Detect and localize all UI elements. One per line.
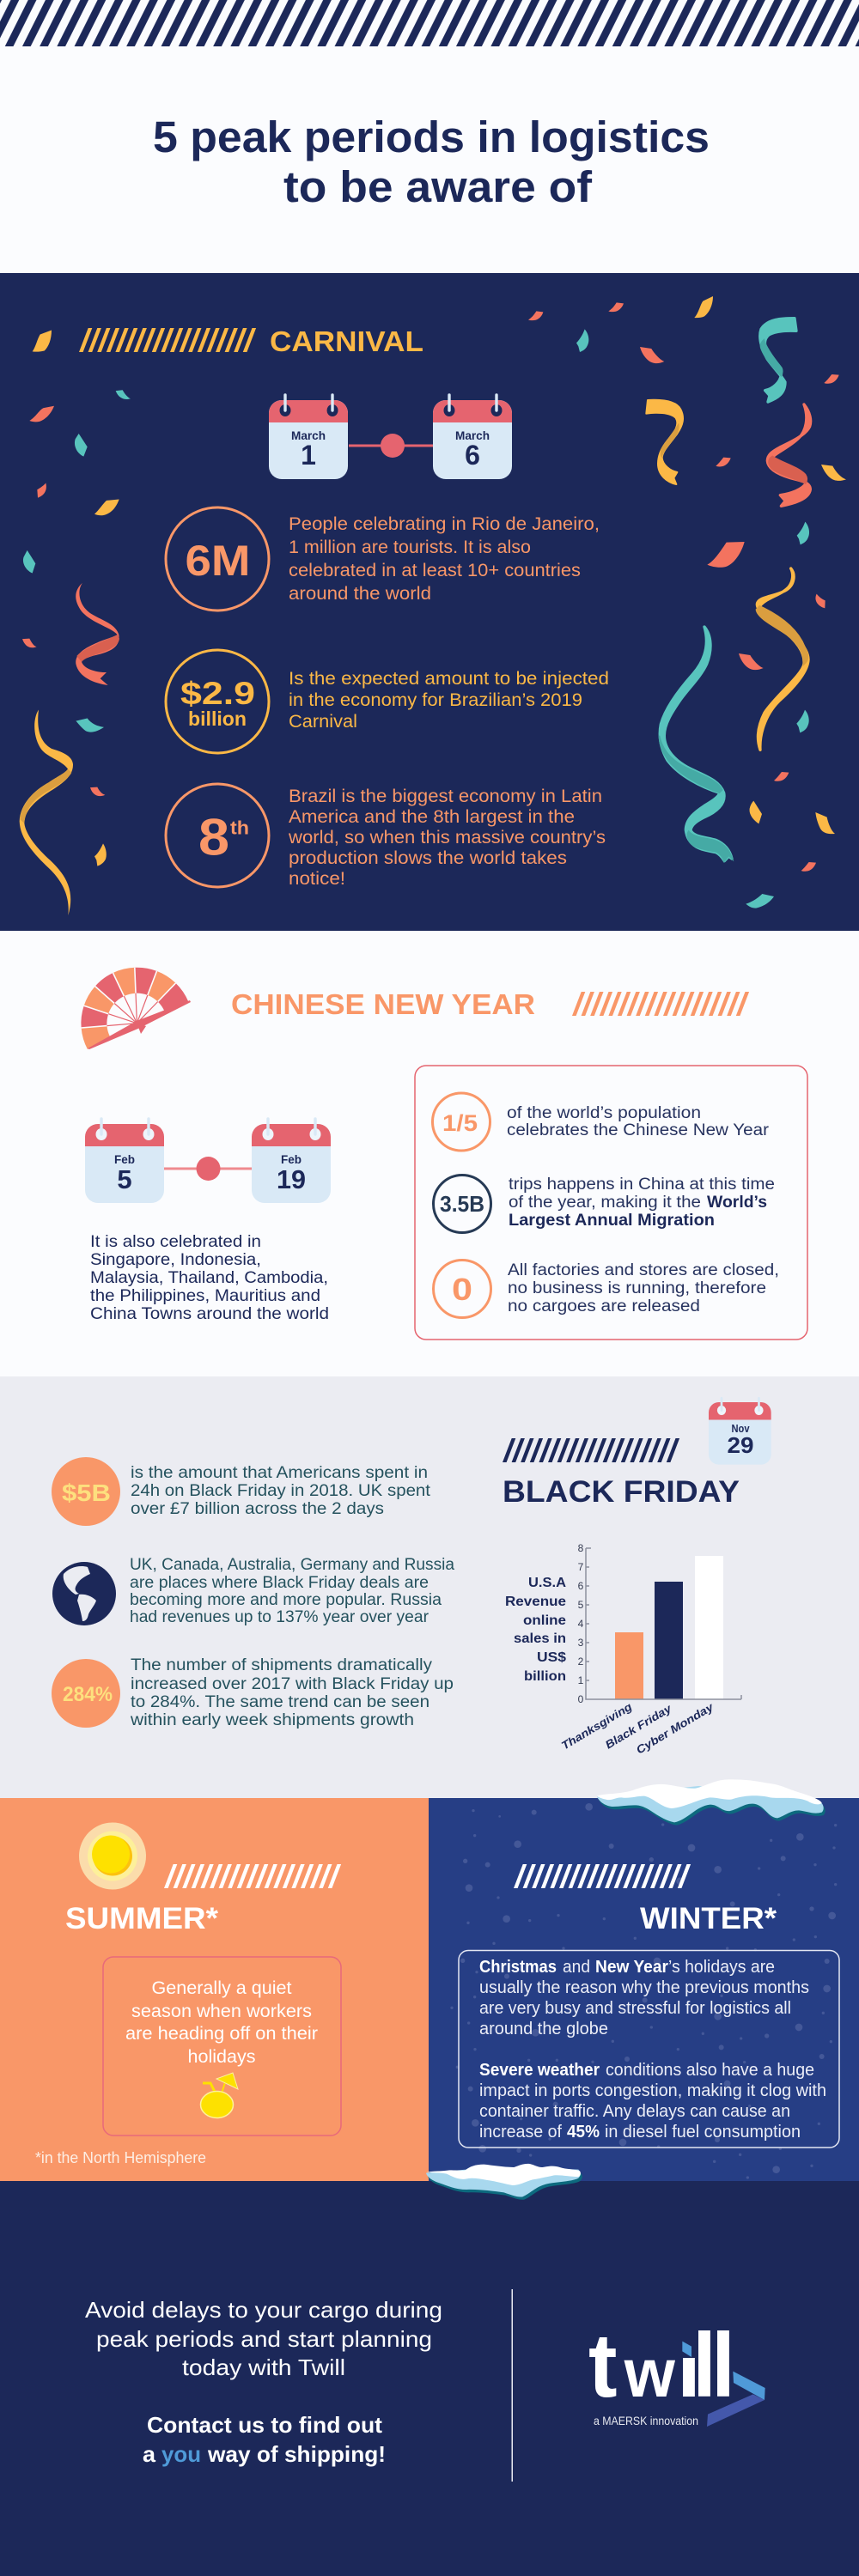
date range: March 1 to March 6: March	[291, 428, 326, 442]
stat: 284%: to 284%. The same trend can be seen	[131, 1693, 430, 1711]
stat: 3.5B: World’s	[707, 1194, 767, 1212]
y axis values	[578, 1542, 584, 1705]
stat: 284%: increased over 2017 with Black Friday up	[131, 1675, 454, 1693]
date range: Feb 5 to Feb 19	[85, 1119, 331, 1203]
stat: $5B	[52, 1457, 431, 1526]
chinese new year heading: CHINESE NEW YEAR	[231, 988, 535, 1020]
stat: 284%: The number of shipments dramatically	[131, 1656, 433, 1674]
confetti and ribbons: top right	[528, 296, 846, 608]
y axis values: 6	[578, 1580, 584, 1592]
stat: 8th: notice!	[289, 869, 345, 889]
panel: winter note: conditions also have a huge	[606, 2061, 814, 2080]
footnote: *in the North Hemisphere	[35, 2149, 206, 2166]
stat: 284%: within early week shipments growth	[130, 1711, 414, 1729]
x axis labels: Cyber Monday	[634, 1700, 716, 1757]
call to action text: today with Twill	[182, 2354, 345, 2380]
stat: 8th: production slows the world takes	[289, 848, 567, 868]
text: other countries celebrating: China Towns around the world	[90, 1305, 329, 1323]
chart axis title: U.S.A	[528, 1576, 566, 1590]
summer hatch	[164, 1864, 341, 1888]
summer heading: SUMMER*	[65, 1902, 218, 1935]
icon: calendar Nov 29: Nov	[732, 1422, 750, 1435]
stat: 8th	[166, 784, 606, 889]
stat: 284%: 284%	[63, 1683, 113, 1706]
date range: March 1 to March 6: March	[455, 428, 490, 442]
call to action text: you	[161, 2441, 201, 2467]
divider	[512, 2289, 513, 2482]
logo: twill	[588, 2314, 765, 2427]
chart axis title: US$	[537, 1650, 566, 1665]
panel: winter note: Severe weather	[479, 2061, 600, 2080]
stat: globe: UK, Canada, Australia, Germany and Russia	[130, 1556, 454, 1574]
stat: 6M: People celebrating in Rio de Janeiro,	[289, 514, 600, 534]
black friday heading: BLACK FRIDAY	[503, 1475, 740, 1509]
logo: twill: w	[624, 2334, 675, 2411]
black friday hatch	[503, 1438, 679, 1462]
stat: $2.9 billion: in the economy for Brazilian’s 2019	[289, 690, 582, 710]
stat: 8th: world, so when this massive country’s	[288, 828, 606, 848]
stat: 8th: America and the 8th largest in the	[289, 807, 575, 827]
panel: winter note: around the globe	[479, 2020, 608, 2038]
panel: winter note: container traffic. Any delays can cause an	[479, 2102, 790, 2121]
call to action text	[85, 2297, 442, 2467]
chinese new year hatch	[572, 992, 749, 1016]
stat: 0: no cargoes are released	[508, 1297, 700, 1315]
icon: coconut drink	[201, 2073, 238, 2117]
panel: winter note: in diesel fuel consumption	[605, 2123, 801, 2142]
stat: 6M: around the world	[289, 584, 431, 604]
stat: 1/5: of the world’s population	[507, 1104, 701, 1122]
call to action text: way of shipping!	[207, 2441, 386, 2467]
winter hatch	[514, 1864, 691, 1888]
stat: 6M: 1 million are tourists. It is also	[289, 538, 531, 557]
chart axis title: online	[523, 1613, 566, 1628]
logo: twill: i	[677, 2314, 701, 2416]
panel: chinese new year	[0, 931, 859, 1376]
stat: globe: had revenues up to 137% year over year	[130, 1608, 430, 1626]
stat: 6M: 6M	[186, 537, 251, 585]
title: to be aware of	[283, 162, 593, 211]
panel: summer	[0, 1798, 429, 2181]
text: other countries celebrating: the Philippines, Mauritius and	[90, 1287, 320, 1305]
y axis values: 2	[578, 1656, 584, 1668]
date range: March 1 to March 6: 1	[301, 440, 316, 471]
confetti and ribbons: lower right	[659, 568, 835, 908]
y axis values: 3	[578, 1637, 584, 1649]
chart axis title: sales in	[514, 1631, 566, 1646]
title: 5 peak periods in logistics	[153, 112, 710, 161]
chart axis title: Revenue	[505, 1595, 566, 1609]
x axis labels	[559, 1700, 716, 1757]
carnival heading hatch	[79, 328, 256, 352]
panel: winter note: Christmas	[479, 1958, 557, 1977]
stat: 6M	[166, 507, 600, 611]
stat: globe: are places where Black Friday deals are	[130, 1574, 429, 1592]
icon: folding fan	[81, 968, 191, 1049]
text: other countries celebrating: It is also celebrated in	[90, 1233, 261, 1251]
panel: summer note	[103, 1957, 341, 2136]
panel: summer note: are heading off on their	[125, 2024, 318, 2044]
text: other countries celebrating	[90, 1233, 329, 1323]
panel: winter note: and	[563, 1958, 590, 1977]
stat: 3.5B: trips happens in China at this time	[509, 1176, 775, 1194]
panel: winter note: New Year	[595, 1958, 668, 1977]
bar chart: US online revenue	[505, 1542, 741, 1757]
date range: March 1 to March 6	[269, 395, 512, 479]
stat: $5B: is the amount that Americans spent in	[131, 1464, 428, 1482]
stat: $2.9 billion: Carnival	[289, 712, 357, 732]
text: other countries celebrating: Malaysia, Thailand, Cambodia,	[90, 1269, 328, 1287]
stat: 8th: 8	[198, 809, 229, 866]
confetti and ribbons: left side	[20, 330, 131, 915]
panel: summer note: holidays	[187, 2047, 256, 2067]
call to action text: Contact us to find out	[147, 2412, 382, 2438]
stat: 0: 0	[452, 1272, 472, 1307]
chart axis title: billion	[524, 1669, 566, 1684]
date range: Feb 5 to Feb 19: Feb	[281, 1152, 302, 1166]
logo: twill: t	[588, 2314, 617, 2416]
panel: summer note: Generally a quiet	[151, 1978, 292, 1998]
stat: 0: All factories and stores are closed,	[508, 1261, 779, 1279]
stat: $2.9 billion	[166, 650, 609, 753]
icon: calendar Nov 29	[709, 1398, 771, 1465]
stat: $2.9 billion: $2.9	[180, 676, 255, 711]
stat: 8th: Brazil is the biggest economy in Latin	[289, 787, 602, 806]
stat: $2.9 billion: Is the expected amount to be injected	[289, 669, 609, 689]
chart axis title	[505, 1576, 566, 1684]
y axis values: 4	[578, 1618, 584, 1630]
axes	[586, 1548, 741, 1699]
call to action text: peak periods and start planning	[96, 2326, 432, 2352]
bars	[615, 1556, 723, 1699]
icon: calendar Nov 29: 29	[727, 1432, 754, 1458]
date range: Feb 5 to Feb 19: 19	[277, 1164, 306, 1194]
y axis values: 5	[578, 1599, 584, 1611]
title	[153, 112, 710, 211]
x axis labels: Black Friday	[603, 1701, 674, 1752]
logo: twill: l	[711, 2314, 735, 2416]
panel: winter note: increase of	[479, 2123, 562, 2142]
date range: March 1 to March 6: 6	[465, 440, 480, 471]
snow cap: bottom of winter panel	[426, 2164, 582, 2200]
y axis values: 1	[578, 1674, 584, 1686]
carnival heading: CARNIVAL	[270, 325, 423, 357]
panel: winter note	[459, 1951, 839, 2148]
stat: 1/5: celebrates the Chinese New Year	[507, 1121, 770, 1139]
icon: sun	[79, 1822, 146, 1889]
panel: winter note: 45%	[567, 2123, 600, 2142]
stat: 1/5	[433, 1093, 770, 1151]
stat: 0: no business is running, therefore	[508, 1279, 766, 1297]
panel: winter	[429, 1798, 859, 2181]
stat: 3.5B	[433, 1175, 775, 1233]
date range: Feb 5 to Feb 19: 5	[117, 1164, 132, 1194]
snow cap: top of winter panel	[597, 1779, 825, 1826]
stat: $5B: over £7 billion across the 2 days	[131, 1500, 384, 1518]
y axis values: 0	[578, 1693, 584, 1705]
y axis values: 7	[578, 1561, 584, 1573]
stat: 6M: celebrated in at least 10+ countries	[289, 561, 581, 580]
stat: $5B: $5B	[62, 1479, 111, 1506]
panel: summer note: season when workers	[131, 2002, 312, 2021]
stat: 284%	[52, 1656, 454, 1729]
stat: globe: becoming more and more popular. Russia	[130, 1591, 442, 1609]
stat: 3.5B: of the year, making it the	[509, 1194, 701, 1212]
panel: black friday	[0, 1376, 859, 1798]
stat: 3.5B: 3.5B	[440, 1191, 484, 1217]
panel: footer call to action	[0, 2181, 859, 2576]
stat: $5B: 24h on Black Friday in 2018. UK spent	[131, 1482, 431, 1500]
stat: 1/5: 1/5	[442, 1110, 478, 1136]
logo: twill: l	[692, 2314, 716, 2416]
snowflakes	[450, 1803, 837, 2179]
logo: twill: a MAERSK innovation	[594, 2414, 698, 2427]
panel: winter note: impact in ports congestion, making it clog with	[479, 2081, 826, 2100]
icon: globe	[52, 1562, 116, 1625]
panel: carnival	[0, 273, 859, 931]
x axis labels: Thanksgiving	[559, 1700, 634, 1753]
y axis values: 8	[578, 1542, 584, 1554]
stat: globe	[52, 1556, 454, 1626]
stat: 3.5B: Largest Annual Migration	[509, 1212, 715, 1230]
stat: 0	[433, 1261, 779, 1317]
winter heading: WINTER*	[640, 1902, 777, 1935]
stat: 8th: th	[230, 817, 249, 838]
call to action text: a	[143, 2441, 156, 2467]
panel: winter note: are very busy and stressful for logistics all	[479, 1999, 791, 2018]
panel: chinese new year stats	[415, 1066, 807, 1340]
date range: Feb 5 to Feb 19: Feb	[114, 1152, 135, 1166]
call to action text: Avoid delays to your cargo during	[85, 2297, 442, 2323]
top stripe band	[0, 0, 859, 46]
panel: winter note: ’s holidays are	[668, 1958, 775, 1977]
panel: winter note: usually the reason why the previous months	[479, 1978, 809, 1997]
text: other countries celebrating: Singapore, Indonesia,	[90, 1251, 261, 1269]
stat: $2.9 billion: billion	[188, 708, 247, 730]
